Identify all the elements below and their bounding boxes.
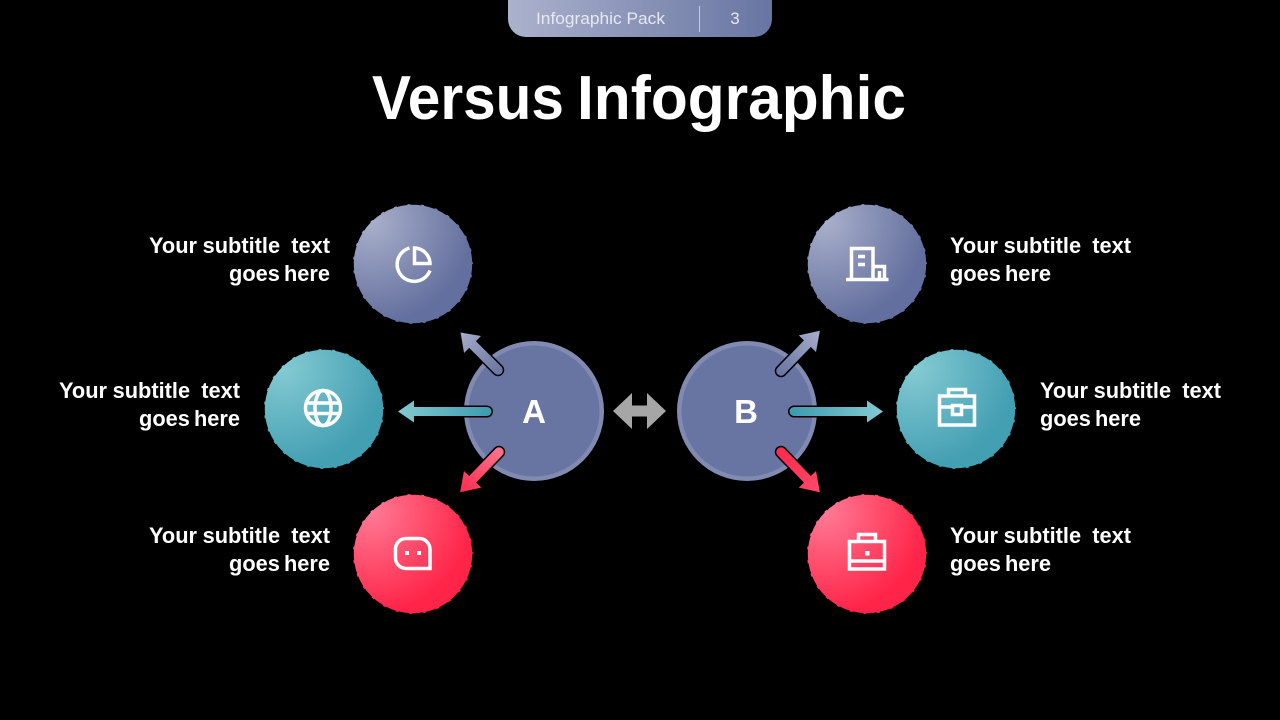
arrow: A to bottom left <box>451 444 508 501</box>
icon: globe <box>306 390 340 426</box>
label: middle left: Your subtitle text <box>59 378 241 403</box>
label: top right: Your subtitle text <box>950 233 1132 258</box>
label: middle left <box>59 378 241 431</box>
central circle B <box>677 341 817 481</box>
header label: Infographic Pack <box>536 9 665 28</box>
icon: pie chart <box>397 248 430 281</box>
central circle A <box>464 341 604 481</box>
label: top left: goes here <box>229 261 330 286</box>
central circle B: B <box>734 393 758 430</box>
central circle A: A <box>522 393 546 430</box>
arrow: A to left <box>398 400 487 422</box>
title: Versus <box>372 64 564 133</box>
header tab <box>508 0 772 37</box>
arrow: B to bottom right <box>772 444 829 501</box>
title: Infographic <box>577 64 906 133</box>
node: top left <box>353 204 473 324</box>
label: bottom right: Your subtitle text <box>950 523 1132 548</box>
node: bottom left <box>353 494 473 614</box>
label: middle right: Your subtitle text <box>1040 378 1222 403</box>
label: top right: goes here <box>950 261 1051 286</box>
arrow: A to top left <box>452 324 506 378</box>
versus double arrow <box>613 393 666 429</box>
node: bottom right <box>807 494 927 614</box>
label: top left: Your subtitle text <box>149 233 331 258</box>
label: bottom left <box>149 523 331 576</box>
icon: briefcase <box>850 534 884 569</box>
node: top right <box>807 204 927 324</box>
node: middle left <box>264 349 384 469</box>
label: bottom left: goes here <box>229 551 330 576</box>
label: top left <box>149 233 331 286</box>
icon: chat bubble <box>396 538 430 568</box>
node: middle right <box>896 349 1016 469</box>
arrow: B to top right <box>772 322 829 379</box>
label: middle right <box>1040 378 1222 431</box>
arrow: B to right <box>794 400 883 422</box>
label: bottom right <box>950 523 1132 576</box>
label: bottom right: goes here <box>950 551 1051 576</box>
icon: toolbox <box>940 390 974 425</box>
page number: 3 <box>730 9 740 28</box>
label: middle left: goes here <box>139 406 240 431</box>
label: top right <box>950 233 1132 286</box>
label: bottom left: Your subtitle text <box>149 523 331 548</box>
icon: building <box>846 248 888 280</box>
label: middle right: goes here <box>1040 406 1141 431</box>
